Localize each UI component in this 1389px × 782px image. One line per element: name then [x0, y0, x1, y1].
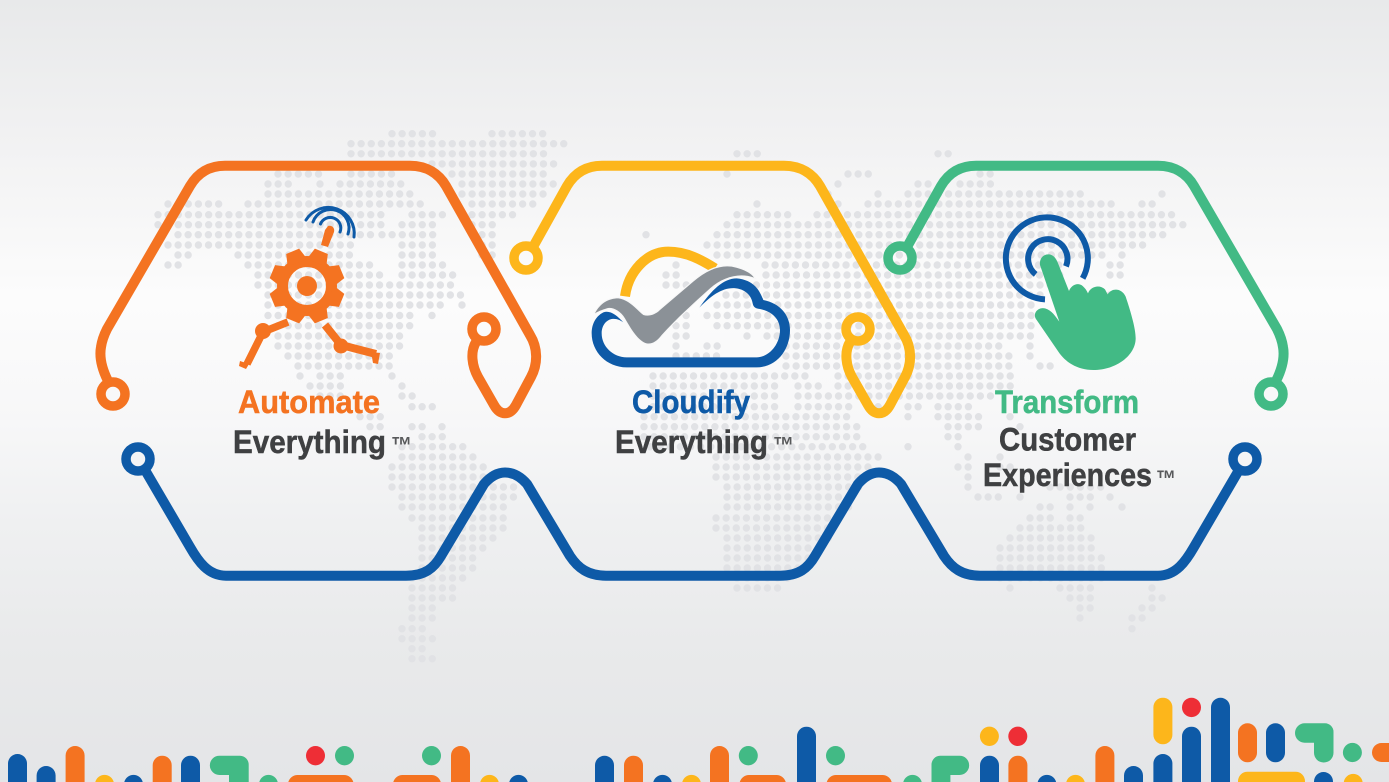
label: Cloudify Everything: Cloudify	[632, 384, 750, 420]
label: Cloudify Everything	[615, 384, 794, 460]
icon: cloud with check mark	[592, 252, 790, 367]
label: Automate Everything: Everything	[233, 424, 386, 460]
label: Cloudify Everything: ™	[773, 432, 794, 460]
label: Automate Everything	[233, 384, 412, 460]
label: Automate Everything: Automate	[238, 384, 380, 420]
label: Automate Everything: ™	[391, 432, 412, 460]
right arm	[325, 325, 380, 364]
label: Transform Customer Experiences: Transform	[995, 384, 1139, 420]
green connector line	[888, 166, 1284, 406]
check mark	[595, 266, 754, 344]
blue connector line	[126, 447, 1257, 576]
touch rings	[1006, 217, 1088, 299]
label: Transform Customer Experiences	[983, 384, 1176, 493]
label: Transform Customer Experiences: Experiences	[983, 457, 1152, 493]
label: Cloudify Everything: Everything	[615, 424, 768, 460]
antenna	[321, 226, 334, 247]
hand	[1035, 254, 1136, 370]
left arm	[239, 322, 288, 369]
orange connector line	[100, 166, 536, 413]
gear	[268, 247, 346, 325]
wifi arcs	[306, 207, 354, 237]
label: Transform Customer Experiences: ™	[1156, 466, 1176, 493]
icon: gear with robot arms and wifi signal	[239, 207, 380, 369]
cloud outline	[592, 278, 790, 367]
label: Transform Customer Experiences: Customer	[999, 422, 1136, 458]
icon: hand tapping	[1006, 217, 1136, 370]
yellow connector line	[514, 166, 910, 413]
sun arc	[625, 252, 715, 296]
bottom data-pill band	[8, 698, 1389, 782]
dotted world map	[158, 134, 1184, 659]
